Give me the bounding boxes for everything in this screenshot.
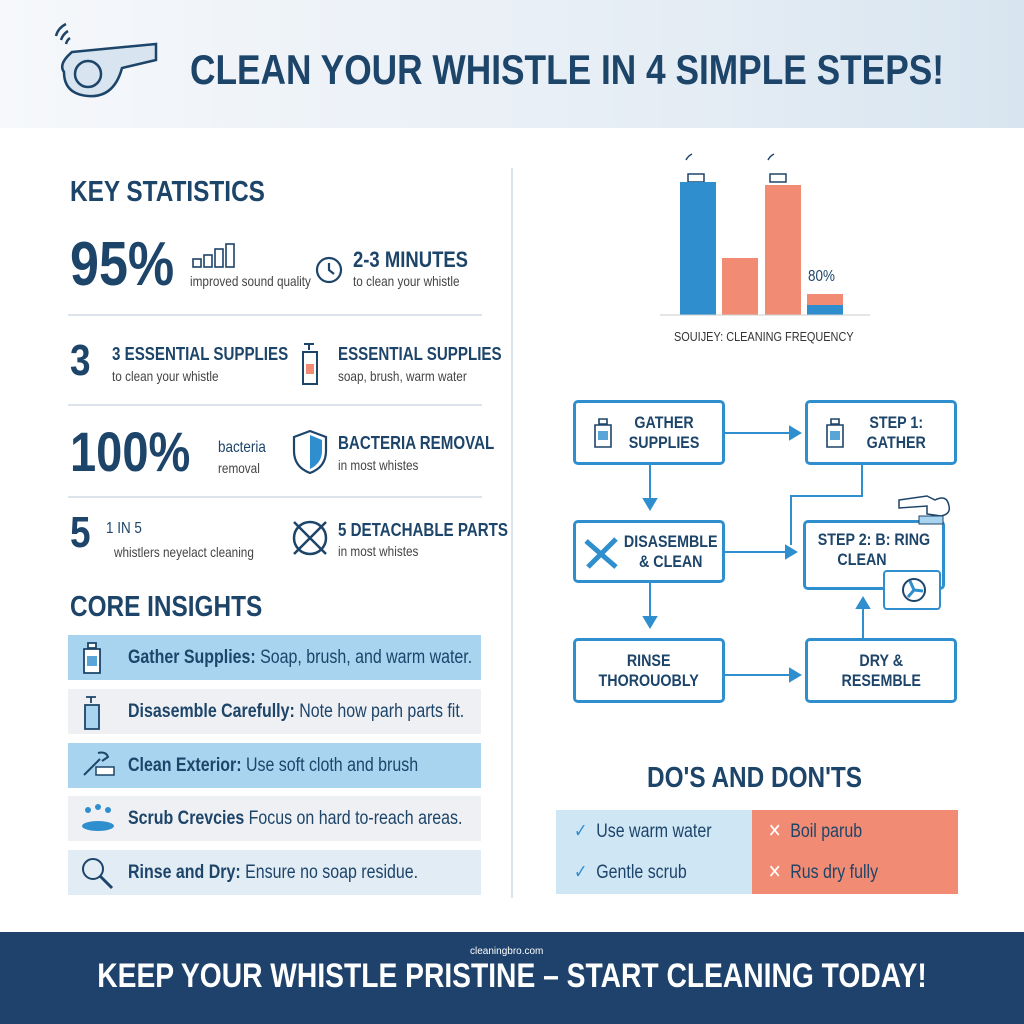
- stat row 4: in most whistes: [338, 543, 418, 559]
- step: disassemble: [573, 520, 725, 583]
- insight 5: Rinse and Dry: Ensure no soap residue.: [128, 862, 418, 883]
- step: rinse: [573, 638, 725, 703]
- step 2 cleaning: STEP 2: B: RING: [818, 530, 930, 549]
- step: rinse: RINSE: [627, 650, 671, 670]
- step: dry: RESEMBLE: [841, 670, 921, 690]
- insight 1: Gather Supplies: Soap, brush, and warm water.: [128, 647, 472, 668]
- stat row 3: BACTERIA REMOVAL: [338, 433, 494, 453]
- insight 4: Scrub Crevcies Focus on hard to-reach areas.: [128, 808, 462, 829]
- footer banner: cleaningbro.com: [470, 946, 543, 957]
- header band: [0, 0, 1024, 128]
- step 1 gather: GATHER: [866, 432, 926, 452]
- stat row 1: [70, 230, 468, 299]
- insight 5: [68, 850, 481, 895]
- step: gather supplies: GATHER: [634, 412, 694, 432]
- stat row 2: to clean your whistle: [112, 368, 219, 384]
- do's and don'ts table: ✕ Rus dry fully: [768, 862, 878, 883]
- insight 2: [68, 689, 481, 734]
- step 2 cleaning: [803, 520, 945, 590]
- stat row 4: 1 IN 5: [106, 520, 142, 537]
- do's and don'ts table: ✕ Boil parub: [768, 821, 862, 842]
- stat row 4: 5 DETACHABLE PARTS: [338, 520, 508, 540]
- step: dry: [805, 638, 957, 703]
- bar chart: 80%: [808, 268, 835, 285]
- step 1 gather: [805, 400, 957, 465]
- insight 3: [68, 743, 481, 788]
- stat row 4: [70, 508, 508, 560]
- stat row 1: 95%: [70, 230, 174, 299]
- stat row 2: 3: [70, 336, 91, 385]
- step: rinse: THOROUOBLY: [599, 670, 699, 690]
- insights list: [68, 635, 481, 895]
- step: disassemble: & CLEAN: [639, 552, 703, 570]
- stat row 3: removal: [218, 460, 260, 476]
- stat row 1: improved sound quality: [190, 273, 311, 289]
- divider vertical: [511, 168, 513, 898]
- stat row 4: 5: [70, 508, 91, 557]
- stat row 3: bacteria: [218, 439, 266, 456]
- do's and don'ts table: ✓ Use warm water: [574, 821, 712, 842]
- step 2 cleaning: CLEAN: [837, 550, 887, 569]
- step: disassemble: DISASEMBLE: [624, 532, 718, 550]
- do's and don'ts table: ✓ Gentle scrub: [574, 862, 687, 883]
- stat row 2: ESSENTIAL SUPPLIES: [338, 344, 502, 364]
- stat row 2: 3 ESSENTIAL SUPPLIES: [112, 344, 288, 364]
- step: dry: DRY &: [859, 650, 903, 670]
- insight 2: Disasemble Carefully: Note how parh parts fit.: [128, 701, 464, 722]
- flowchart: [573, 400, 957, 703]
- insight 1: [68, 635, 481, 680]
- stat row 3: 100%: [70, 420, 190, 483]
- stat row 4: whistlers neyelact cleaning: [114, 544, 254, 560]
- stat row 2: soap, brush, warm water: [338, 368, 467, 384]
- do's and don'ts table: [556, 810, 958, 894]
- stat row 3: in most whistes: [338, 457, 418, 473]
- heading: core insights: CORE INSIGHTS: [70, 591, 262, 623]
- title: CLEAN YOUR WHISTLE IN 4 SIMPLE STEPS!: [190, 46, 944, 93]
- icon: whistle with brush: [898, 495, 950, 524]
- stat row 2: [70, 336, 502, 385]
- icon: whistle: [54, 22, 158, 98]
- stat row 3: [70, 420, 494, 483]
- stat row 1: 2-3 MINUTES: [353, 247, 468, 272]
- icon: fan: [883, 570, 941, 610]
- bar chart: SOUIJEY: CLEANING FREQUENCY: [674, 329, 854, 344]
- footer banner: [0, 932, 1024, 1024]
- heading: do's and don'ts: DO'S AND DON'TS: [647, 762, 862, 794]
- step: gather supplies: [573, 400, 725, 465]
- stat row 1: to clean your whistle: [353, 273, 460, 289]
- insight 4: [68, 796, 481, 841]
- bar chart: [660, 153, 870, 344]
- step: gather supplies: SUPPLIES: [629, 432, 699, 452]
- footer banner: KEEP YOUR WHISTLE PRISTINE – START CLEANING TODAY!: [97, 957, 927, 995]
- step 1 gather: STEP 1:: [869, 412, 923, 432]
- insight 3: Clean Exterior: Use soft cloth and brush: [128, 755, 418, 776]
- heading: key statistics: KEY STATISTICS: [70, 176, 265, 208]
